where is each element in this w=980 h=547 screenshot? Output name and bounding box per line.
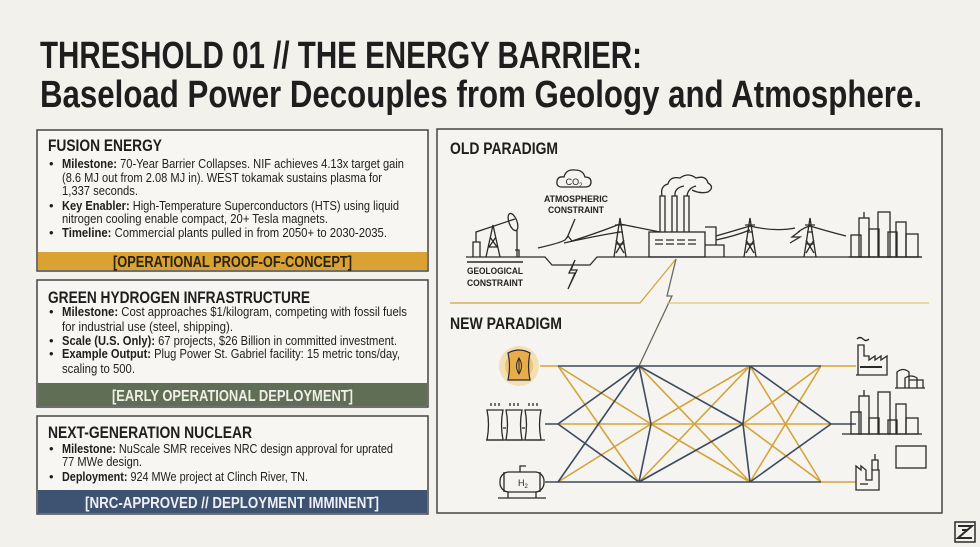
text block: fusion bullets bbox=[49, 156, 404, 240]
icon: factory bbox=[856, 338, 887, 375]
heading: new paradigm: NEW PARADIGM bbox=[450, 314, 562, 333]
icon: hydrogen tank: 2 bbox=[524, 484, 528, 490]
text block: fusion bullets: Milestone: 70-Year Barrier Collapses. NIF achieves 4.13x target gain bbox=[62, 156, 404, 171]
icon: city skyline bbox=[848, 212, 922, 257]
icon: oil pump bbox=[467, 212, 523, 262]
title bbox=[40, 35, 922, 116]
panel: green hydrogen bbox=[37, 280, 428, 407]
ground line with trench bbox=[466, 257, 922, 265]
divider: yellow connector bbox=[450, 259, 929, 366]
label: atmospheric constraint bbox=[544, 194, 608, 215]
label: geological constraint: GEOLOGICAL bbox=[467, 266, 523, 276]
label: geological constraint: CONSTRAINT bbox=[467, 278, 523, 288]
label: geological constraint bbox=[467, 266, 523, 288]
status band: operational proof-of-concept: [OPERATIONAL PROOF-OF-CONCEPT] bbox=[113, 254, 352, 271]
icon: storage tanks bbox=[895, 370, 925, 388]
text block: hydrogen bullets: • bbox=[49, 346, 54, 361]
status band: early operational deployment bbox=[38, 383, 427, 406]
status band: nrc-approved bbox=[38, 490, 427, 513]
status band: nrc-approved: [NRC-APPROVED // DEPLOYMENT IMMINENT] bbox=[85, 495, 379, 512]
text block: hydrogen bullets: scaling to 500. bbox=[62, 361, 135, 376]
status band: operational proof-of-concept bbox=[38, 252, 427, 271]
logo bbox=[955, 522, 975, 542]
icon: cooling towers bbox=[486, 403, 545, 440]
icon: pylons bbox=[614, 218, 846, 257]
text block: fusion bullets: (8.6 MJ out from 2.08 MJ in). WEST tokamak sustains plasma for bbox=[62, 170, 383, 185]
panel: paradigm diagram bbox=[437, 129, 942, 513]
text block: hydrogen bullets: Scale (U.S. Only): 67 projects, $26 Billion in committed investment. bbox=[62, 333, 397, 348]
icon: co2 cloud: CO bbox=[566, 177, 579, 187]
text block: hydrogen bullets: Milestone: Cost approaches $1/kilogram, competing with fossil fuels bbox=[62, 304, 407, 319]
heading: old paradigm: OLD PARADIGM bbox=[450, 139, 558, 158]
icon: hydrogen tank bbox=[498, 466, 546, 498]
text block: fusion bullets: Timeline: Commercial plants pulled in from 2050+ to 2030-2035. bbox=[62, 225, 387, 240]
text block: hydrogen bullets: for industrial use (steel, shipping). bbox=[62, 319, 233, 334]
heading: hydrogen: GREEN HYDROGEN INFRASTRUCTURE bbox=[48, 288, 310, 307]
icon: power plant bbox=[649, 175, 724, 257]
icon: city bbox=[842, 390, 926, 468]
text block: nuclear bullets bbox=[49, 441, 393, 484]
text block: nuclear bullets: • bbox=[49, 441, 54, 456]
network grid bbox=[540, 366, 856, 482]
text block: nuclear bullets: Milestone: NuScale SMR receives NRC design approval for uprated bbox=[62, 441, 393, 456]
panel: fusion energy bbox=[37, 130, 428, 271]
text block: hydrogen bullets: • bbox=[49, 304, 54, 319]
text block: fusion bullets: • bbox=[49, 225, 54, 240]
icon: broken power lines and lightning bbox=[538, 219, 660, 289]
icon: glowing reactor bbox=[499, 346, 539, 386]
text block: fusion bullets: • bbox=[49, 156, 54, 171]
text block: nuclear bullets: Deployment: 924 MWe project at Clinch River, TN. bbox=[62, 469, 308, 484]
icon: industrial plant bbox=[856, 454, 879, 490]
text block: hydrogen bullets: • bbox=[49, 333, 54, 348]
heading: fusion: FUSION ENERGY bbox=[48, 136, 163, 155]
icon: co2 cloud bbox=[557, 170, 591, 189]
text block: fusion bullets: 1,337 seconds. bbox=[62, 183, 138, 198]
icon: co2 cloud: 2 bbox=[579, 183, 583, 189]
text block: hydrogen bullets bbox=[49, 304, 407, 376]
text block: fusion bullets: Key Enabler: High-Temperature Superconductors (HTS) using liquid bbox=[62, 198, 399, 213]
title: THRESHOLD 01 // THE ENERGY BARRIER: bbox=[40, 35, 642, 77]
text block: fusion bullets: nitrogen cooling enable compact, 20+ Tesla magnets. bbox=[62, 211, 328, 226]
icon: hydrogen tank: H bbox=[518, 478, 524, 488]
label: atmospheric constraint: ATMOSPHERIC bbox=[544, 194, 608, 204]
text block: fusion bullets: • bbox=[49, 198, 54, 213]
status band: early operational deployment: [EARLY OPERATIONAL DEPLOYMENT] bbox=[112, 388, 353, 405]
text block: nuclear bullets: • bbox=[49, 469, 54, 484]
text block: hydrogen bullets: Example Output: Plug Power St. Gabriel facility: 15 metric tons/day, bbox=[62, 346, 400, 361]
heading: nuclear: NEXT-GENERATION NUCLEAR bbox=[48, 423, 252, 442]
panel: next-generation nuclear bbox=[37, 416, 428, 514]
label: atmospheric constraint: CONSTRAINT bbox=[548, 205, 604, 215]
text block: nuclear bullets: 77 MWe design. bbox=[62, 454, 142, 469]
